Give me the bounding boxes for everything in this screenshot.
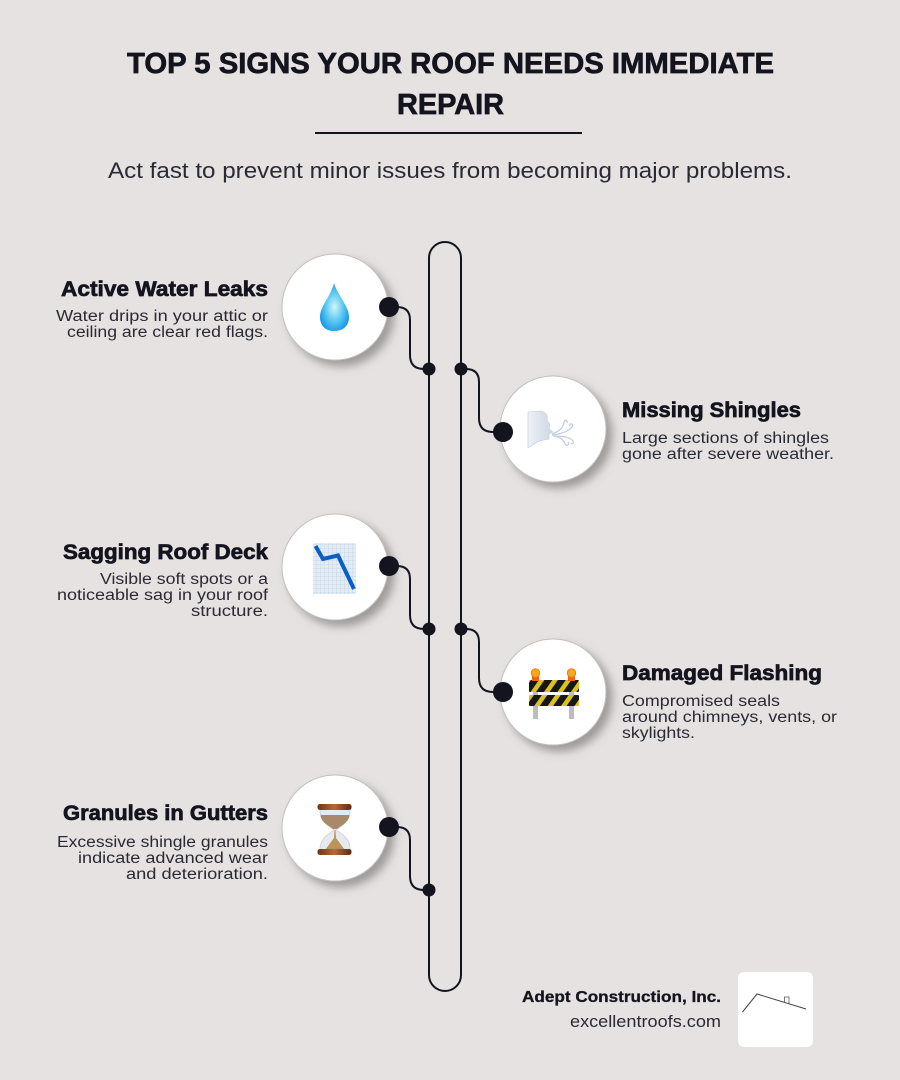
- title: TOP 5 SIGNS YOUR ROOF NEEDS IMMEDIATE: [127, 48, 774, 80]
- description: skylights.: [622, 725, 695, 742]
- description: Water drips in your attic or: [56, 308, 268, 325]
- icon circle: wind face: [493, 376, 606, 482]
- icon circle: hourglass: [282, 775, 399, 881]
- item: sagging roof deck: [57, 514, 399, 620]
- title underline: [315, 132, 582, 134]
- footer: logo: [738, 972, 813, 1047]
- description: gone after severe weather.: [622, 446, 834, 463]
- title: [127, 48, 774, 121]
- central track: [429, 242, 461, 991]
- description: Excessive shingle granules: [57, 834, 268, 851]
- description: Compromised seals: [622, 693, 780, 710]
- description: structure.: [191, 603, 268, 620]
- footer: company name: Adept Construction, Inc.: [522, 989, 721, 1006]
- heading: Sagging Roof Deck: [63, 541, 268, 564]
- description: [57, 571, 269, 620]
- heading: Damaged Flashing: [622, 662, 822, 685]
- description: [57, 834, 268, 883]
- heading: Active Water Leaks: [61, 278, 268, 301]
- description: [622, 430, 834, 463]
- subtitle: Act fast to prevent minor issues from becoming major problems.: [108, 158, 792, 183]
- description: noticeable sag in your roof: [57, 587, 269, 604]
- item: granules in gutters: [57, 775, 399, 883]
- icon circle: barricade: [493, 639, 606, 745]
- description: and deterioration.: [126, 866, 268, 883]
- icon circle: falling chart: [282, 514, 399, 620]
- connectors: [389, 307, 503, 890]
- description: ceiling are clear red flags.: [67, 324, 268, 341]
- description: Visible soft spots or a: [100, 571, 268, 588]
- footer: website: excellentroofs.com: [570, 1013, 721, 1031]
- description: Large sections of shingles: [622, 430, 829, 447]
- heading: Missing Shingles: [622, 399, 801, 422]
- icon circle: water drop: [282, 254, 399, 360]
- heading: Granules in Gutters: [63, 802, 268, 825]
- item: missing shingles: [493, 376, 834, 482]
- title: REPAIR: [397, 89, 504, 121]
- description: [56, 308, 268, 341]
- description: around chimneys, vents, or: [622, 709, 837, 726]
- description: indicate advanced wear: [78, 850, 268, 867]
- item: active water leaks: [56, 254, 399, 360]
- junction dots: [422, 362, 468, 896]
- description: [622, 693, 837, 742]
- item: damaged flashing: [493, 639, 837, 745]
